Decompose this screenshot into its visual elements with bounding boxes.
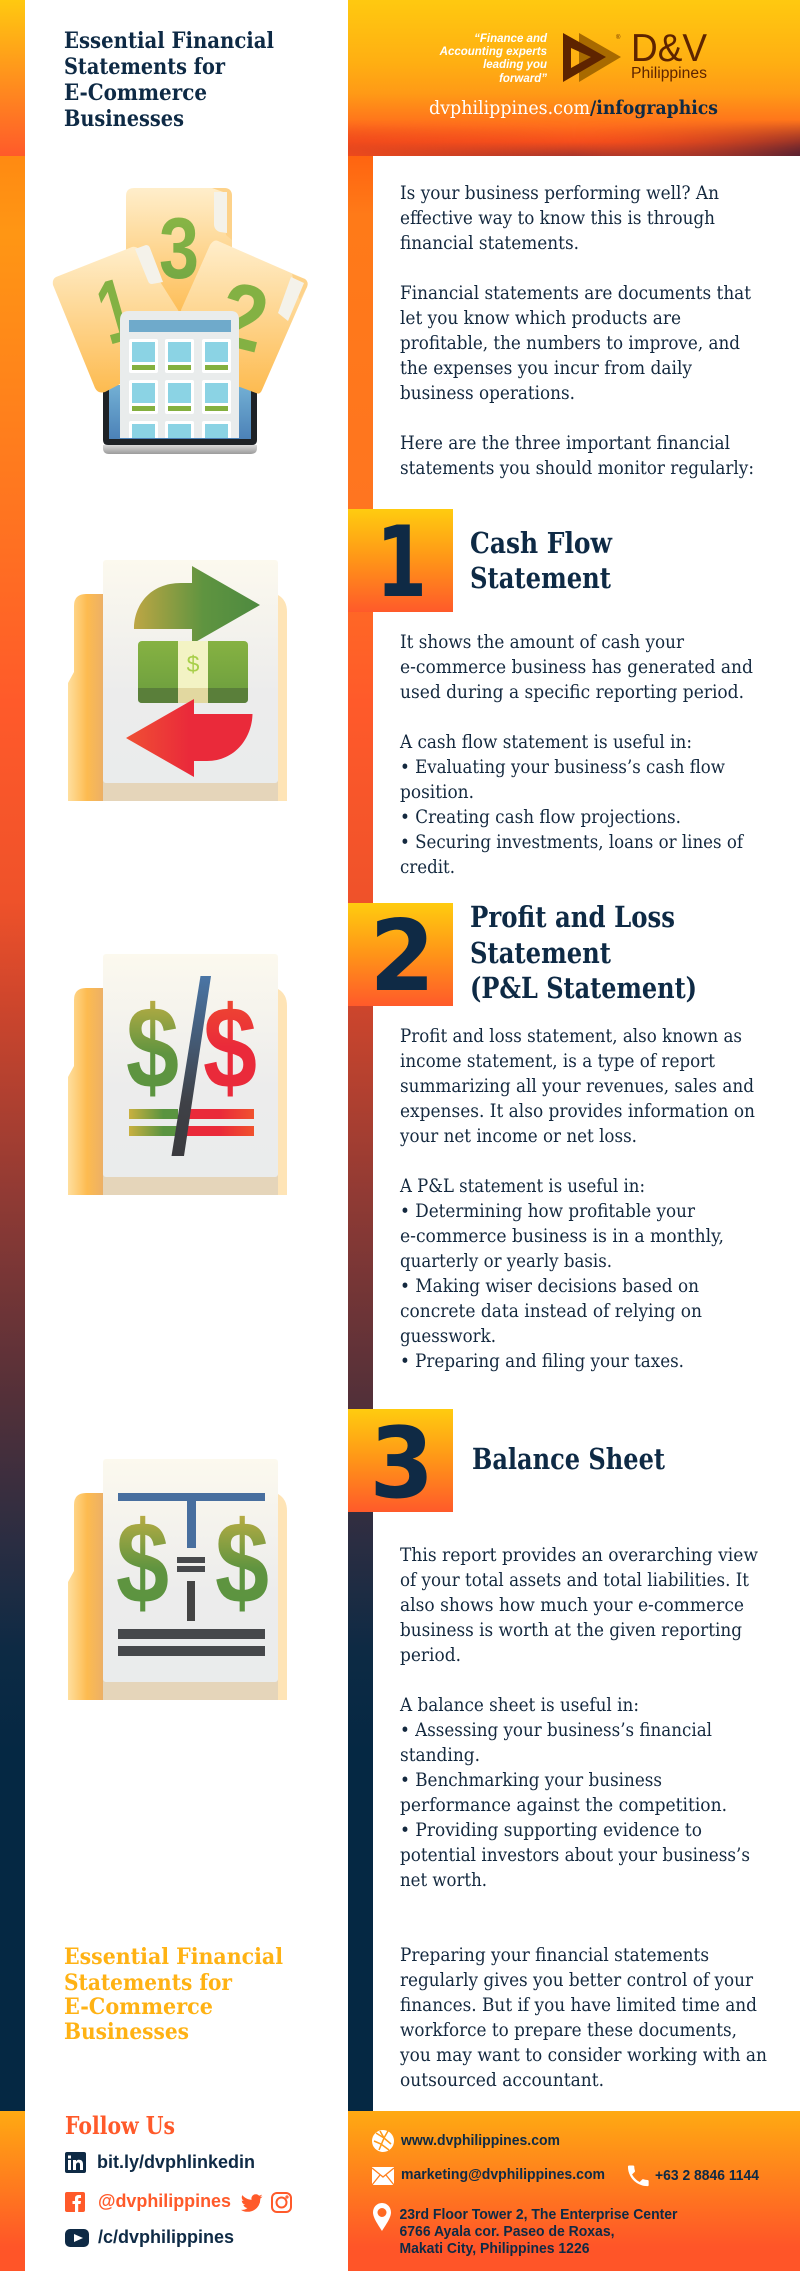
icon: facebook bbox=[65, 2192, 85, 2212]
section 3 text: • Benchmarking your business bbox=[400, 1769, 662, 1791]
laptop frame bbox=[103, 385, 257, 454]
section 3 text: potential investors about your business’s bbox=[400, 1844, 750, 1866]
website: www.dvphilippines.com bbox=[400, 2132, 560, 2149]
website url: dvphilippines.com bbox=[429, 97, 590, 119]
title: Essential Financial bbox=[64, 28, 274, 54]
section 2 heading: (P&L Statement) bbox=[470, 971, 697, 1005]
section 3 text: net worth. bbox=[400, 1869, 487, 1891]
tagline: “Finance and bbox=[474, 33, 548, 45]
intro text: Here are the three important financial bbox=[400, 432, 730, 454]
section 2 text: e-commerce business is in a monthly, bbox=[400, 1225, 724, 1247]
closing text: workforce to prepare these documents, bbox=[400, 2019, 737, 2041]
section 1 text: • Evaluating your business’s cash flow bbox=[400, 756, 726, 778]
follow us panel bbox=[65, 2111, 291, 2247]
title: Businesses bbox=[64, 106, 184, 132]
icon: T account bbox=[118, 1493, 265, 1656]
folder 1 bbox=[53, 245, 205, 392]
section 2 text: your net income or net loss. bbox=[399, 1125, 637, 1147]
section 3 text: period. bbox=[400, 1644, 461, 1666]
footer contact panel bbox=[348, 2111, 800, 2271]
icon: green arrow bbox=[134, 566, 260, 644]
address bbox=[400, 2206, 678, 2257]
icon: phone bbox=[628, 2165, 649, 2186]
phone number: +63 2 8846 1144 bbox=[655, 2167, 760, 2184]
section 1 number box bbox=[348, 506, 453, 620]
section 1 text bbox=[399, 631, 753, 878]
folder 3 bbox=[126, 188, 232, 320]
closing title: Statements for bbox=[64, 1970, 232, 1996]
section 2 text: concrete data instead of relying on bbox=[400, 1300, 702, 1322]
follow us heading: Follow Us bbox=[65, 2111, 175, 2140]
icon: bars bbox=[129, 1109, 254, 1136]
illustration: balance sheet folder bbox=[68, 1459, 287, 1700]
folder 2 bbox=[181, 240, 308, 394]
section 3 text: business is worth at the given reporting bbox=[400, 1619, 742, 1641]
footer left strip bbox=[0, 2111, 25, 2271]
icon: instagram bbox=[272, 2193, 291, 2212]
website url: /infographics bbox=[590, 97, 718, 119]
icon: cash bundle: $ bbox=[187, 651, 200, 677]
folder 3: 3 bbox=[159, 201, 199, 297]
icon: dollar signs bbox=[126, 982, 257, 1113]
section 1 number box: 1 bbox=[376, 506, 427, 620]
icon: dollar signs: $ bbox=[215, 1497, 269, 1628]
icon: twitter bbox=[241, 2194, 263, 2212]
section 1 heading: Cash Flow bbox=[470, 526, 613, 560]
section 2 text: • Determining how profitable your bbox=[400, 1200, 696, 1222]
section 3 text: • Providing supporting evidence to bbox=[400, 1819, 702, 1841]
section 1 text: A cash flow statement is useful in: bbox=[399, 731, 692, 753]
intro text: effective way to know this is through bbox=[400, 207, 715, 229]
closing title: Essential Financial bbox=[64, 1944, 283, 1970]
section 2 text bbox=[399, 1025, 755, 1372]
illustration: three folders and tablet bbox=[53, 188, 308, 454]
section 1 text: e-commerce business has generated and bbox=[400, 656, 753, 678]
section 2 text: guesswork. bbox=[400, 1325, 496, 1347]
tagline bbox=[439, 33, 548, 85]
section 2 text: income statement, is a type of report bbox=[400, 1050, 715, 1072]
icon: red arrow bbox=[126, 699, 252, 777]
illustration: profit and loss folder bbox=[68, 954, 287, 1195]
title: Statements for bbox=[64, 54, 225, 80]
closing text: outsourced accountant. bbox=[400, 2069, 604, 2091]
closing title bbox=[64, 1944, 283, 2045]
tablet panel bbox=[120, 311, 239, 438]
section 2 text: • Making wiser decisions based on bbox=[400, 1275, 699, 1297]
section 3 text: of your total assets and total liabilities. It bbox=[400, 1569, 749, 1591]
section 2 heading: Statement bbox=[470, 936, 612, 970]
section 1 heading: Statement bbox=[470, 561, 612, 595]
icon: dollar signs: $ bbox=[126, 982, 179, 1113]
section 3 text: This report provides an overarching view bbox=[400, 1544, 759, 1566]
section 3 text bbox=[399, 1544, 759, 1891]
section 3 text: performance against the competition. bbox=[400, 1794, 727, 1816]
intro text bbox=[400, 182, 754, 479]
section 2 text: A P&L statement is useful in: bbox=[399, 1175, 645, 1197]
intro text: business operations. bbox=[400, 382, 575, 404]
section 3 text: • Assessing your business’s financial bbox=[400, 1719, 712, 1741]
title bbox=[64, 28, 274, 132]
section 1 text: used during a specific reporting period. bbox=[400, 681, 744, 703]
section 2 heading bbox=[470, 900, 697, 1005]
intro text: financial statements. bbox=[400, 232, 579, 254]
section 2 text: quarterly or yearly basis. bbox=[400, 1250, 612, 1272]
intro text: let you know which products are bbox=[400, 307, 681, 329]
right column gradient strip bbox=[348, 156, 373, 2111]
closing title: E-Commerce bbox=[64, 1994, 213, 2020]
intro text: the expenses you incur from daily bbox=[400, 357, 692, 379]
intro text: profitable, the numbers to improve, and bbox=[400, 332, 740, 354]
section 1 text: credit. bbox=[400, 856, 455, 878]
intro text: Financial statements are documents that bbox=[400, 282, 751, 304]
section 3 text: A balance sheet is useful in: bbox=[399, 1694, 639, 1716]
logo: D&V Philippines bbox=[563, 27, 707, 82]
icon: youtube bbox=[65, 2229, 89, 2247]
closing title: Businesses bbox=[64, 2019, 189, 2045]
closing text: regularly gives you better control of your bbox=[400, 1969, 754, 1991]
icon: dollar signs: $ bbox=[203, 982, 257, 1113]
icon: cash bundle bbox=[138, 641, 248, 703]
section 2 number box: 2 bbox=[370, 900, 435, 1014]
section 2 text: expenses. It also provides information on bbox=[400, 1100, 755, 1122]
address: 6766 Ayala cor. Paseo de Roxas, bbox=[400, 2223, 614, 2240]
logo: D&V Philippines: D&V bbox=[631, 27, 707, 70]
section 1 text: It shows the amount of cash your bbox=[400, 631, 685, 653]
section 3 text: also shows how much your e-commerce bbox=[400, 1594, 744, 1616]
intro text: Is your business performing well? An bbox=[400, 182, 719, 204]
icon: slash bbox=[172, 976, 211, 1156]
section 3 number box: 3 bbox=[370, 1407, 434, 1521]
linkedin handle: bit.ly/dvphlinkedin bbox=[97, 2152, 255, 2172]
left side gradient strip bbox=[0, 0, 25, 2111]
title: E-Commerce bbox=[64, 80, 207, 106]
section 3 number box bbox=[348, 1407, 453, 1521]
closing text bbox=[399, 1944, 767, 2091]
icon: dollar signs: $ bbox=[116, 1497, 169, 1628]
tagline: forward” bbox=[499, 73, 547, 85]
section 2 heading: Profit and Loss bbox=[470, 900, 675, 934]
folder 1: 1 bbox=[87, 259, 145, 364]
header banner bbox=[348, 0, 800, 156]
section 1 text: position. bbox=[400, 781, 474, 803]
section 1 text: • Securing investments, loans or lines of bbox=[400, 831, 745, 853]
icon: envelope bbox=[372, 2167, 394, 2185]
logo: D&V Philippines: Philippines bbox=[631, 65, 707, 82]
icon: map pin bbox=[373, 2203, 391, 2231]
social handle: @dvphilippines bbox=[98, 2191, 231, 2211]
logo: D&V Philippines: ® bbox=[616, 34, 621, 41]
section 3 text: standing. bbox=[400, 1744, 480, 1766]
address: Makati City, Philippines 1226 bbox=[400, 2240, 590, 2257]
section 2 text: Profit and loss statement, also known as bbox=[400, 1025, 742, 1047]
closing text: you may want to consider working with an bbox=[399, 2044, 767, 2066]
section 2 number box bbox=[348, 900, 453, 1014]
tagline: Accounting experts bbox=[439, 46, 547, 58]
section 3 heading: Balance Sheet bbox=[472, 1442, 665, 1476]
icon: linkedin bbox=[65, 2152, 86, 2173]
icon: dollar signs bbox=[116, 1497, 269, 1628]
tagline: leading you bbox=[483, 59, 547, 71]
youtube handle: /c/dvphilippines bbox=[98, 2227, 234, 2247]
illustration: cash flow folder bbox=[68, 560, 287, 801]
address: 23rd Floor Tower 2, The Enterprise Center bbox=[400, 2206, 678, 2223]
email: marketing@dvphilippines.com bbox=[401, 2166, 605, 2183]
section 2 text: • Preparing and filing your taxes. bbox=[400, 1350, 684, 1372]
website url bbox=[429, 97, 718, 119]
closing text: finances. But if you have limited time and bbox=[400, 1994, 757, 2016]
section 2 text: summarizing all your revenues, sales and bbox=[400, 1075, 754, 1097]
section 1 text: • Creating cash flow projections. bbox=[400, 806, 681, 828]
section 1 heading bbox=[470, 526, 613, 595]
intro text: statements you should monitor regularly: bbox=[400, 457, 754, 479]
folder 2: 2 bbox=[208, 262, 277, 373]
icon: globe bbox=[372, 2130, 394, 2152]
closing text: Preparing your financial statements bbox=[400, 1944, 709, 1966]
